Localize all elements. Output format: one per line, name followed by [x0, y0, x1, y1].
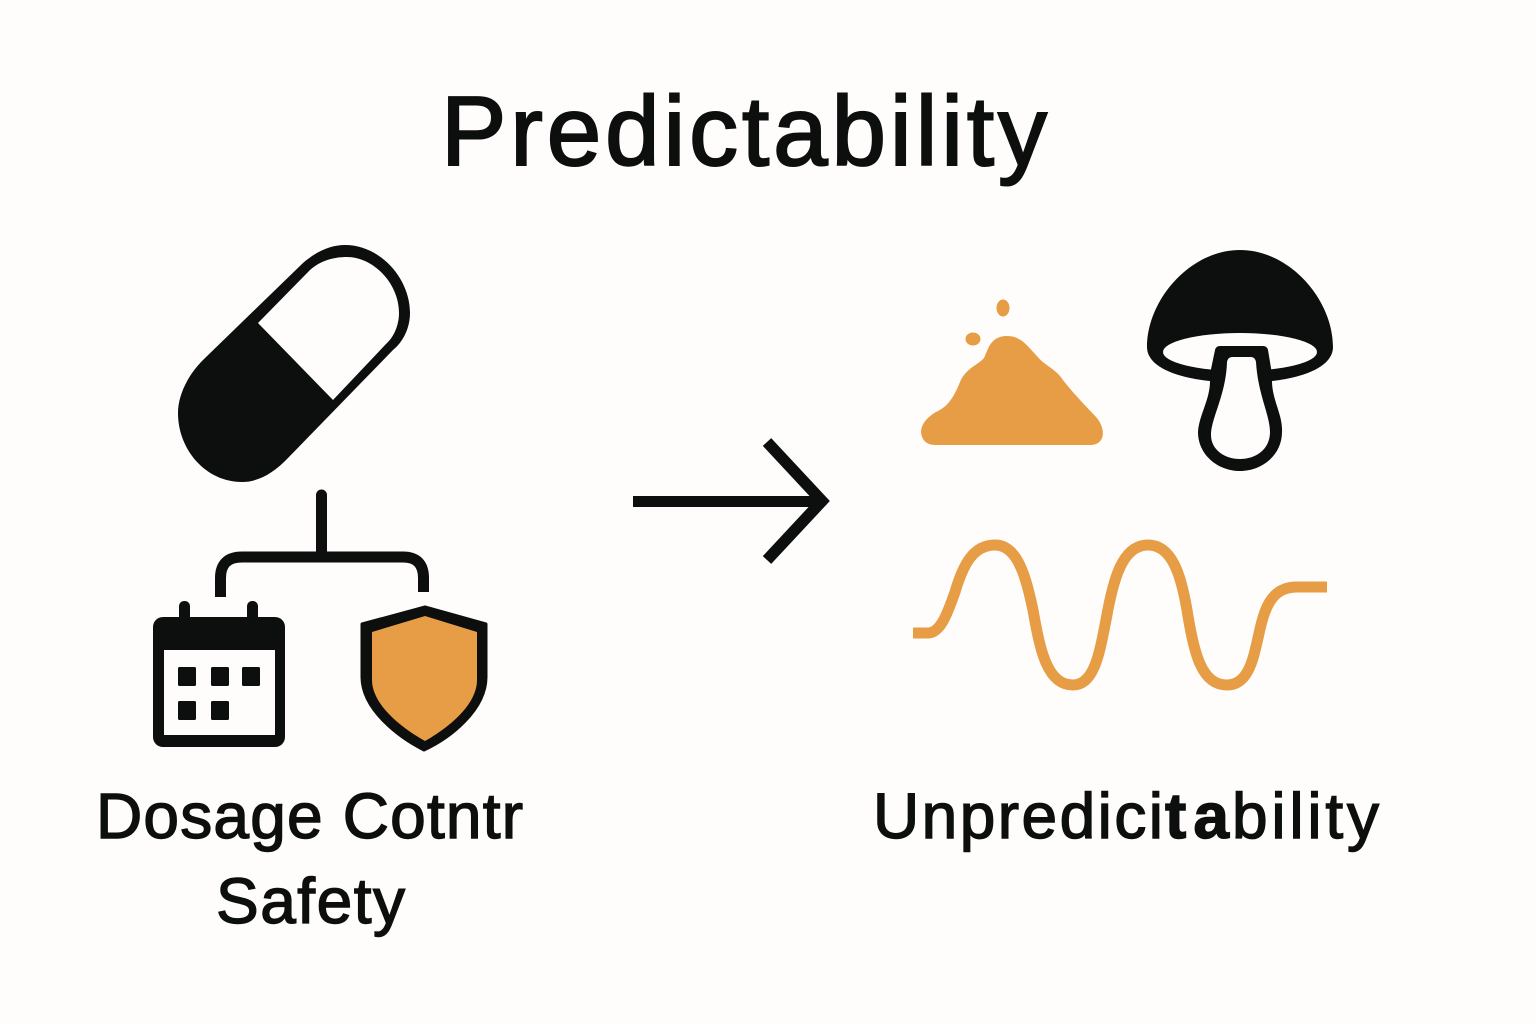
label: unpredictability: bility — [1232, 780, 1379, 852]
icon: capsule — [178, 245, 410, 482]
label: safety: Safety — [216, 865, 405, 937]
connector: branching lines — [220, 495, 424, 597]
label: unpredictability: ta — [1165, 780, 1229, 852]
icon: mushroom — [1147, 250, 1333, 471]
title: Predictability — [441, 76, 1047, 186]
icon: shield — [362, 607, 486, 750]
label: dosage control: Dosage Cotntr — [96, 780, 523, 852]
icon: calendar — [153, 601, 285, 747]
icon: powder pile — [921, 300, 1103, 445]
arrow — [633, 442, 822, 560]
label: unpredictability: Unpredici — [873, 780, 1163, 852]
label: unpredictability — [873, 780, 1379, 852]
chart: oscillating wave — [913, 545, 1327, 685]
